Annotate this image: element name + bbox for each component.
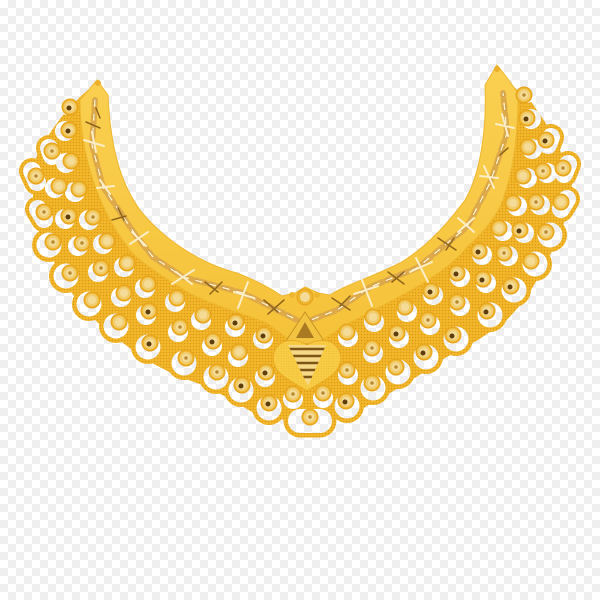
pendant: heart with striped triangle xyxy=(273,312,341,391)
right clasp tip xyxy=(494,66,500,72)
necklace xyxy=(32,65,572,424)
lacework bib with scalloped edge xyxy=(32,68,572,424)
pendant crown beads xyxy=(289,289,320,305)
left clasp tip xyxy=(95,80,101,86)
engraved chain along the collar xyxy=(84,93,514,323)
collar band xyxy=(80,65,518,345)
gold beads xyxy=(36,95,563,417)
